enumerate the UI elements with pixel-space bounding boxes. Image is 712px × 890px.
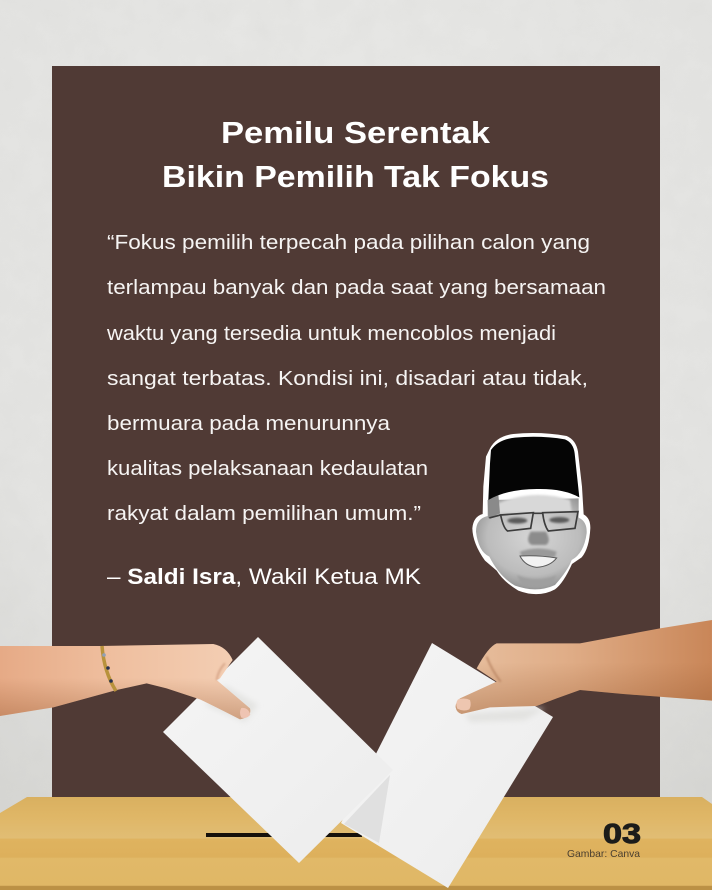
left finger crease [217, 663, 225, 680]
portrait white outline [472, 433, 590, 594]
portrait: Saldi Isra [472, 433, 590, 594]
left thumbnail [240, 708, 250, 718]
right arm shading [456, 620, 712, 714]
portrait smile [520, 556, 557, 567]
box top [0, 797, 712, 890]
quote text: kualitas pelaksanaan kedaulatan [107, 458, 428, 480]
title [162, 115, 549, 194]
right arm shape [456, 620, 712, 714]
quote text: waktu yang tersedia untuk mencoblos menjadi [106, 323, 556, 345]
portrait nose [528, 532, 549, 545]
left ballot [163, 637, 393, 863]
ballot slot [206, 833, 362, 837]
quote text [106, 232, 606, 525]
image credit: Gambar: Canva [567, 848, 640, 860]
left arm shading [0, 644, 250, 719]
quote text: rakyat dalam pemilihan umum.” [107, 503, 421, 525]
quote text: sangat terbatas. Kondisi ini, disadari atau tidak, [107, 368, 588, 390]
bracelet [102, 646, 116, 691]
portrait hair [488, 494, 500, 518]
quote text: “Fokus pemilih terpecah pada pilihan calon yang [107, 232, 590, 254]
thumb shadow on right ballot [465, 708, 545, 722]
right ballot [341, 643, 553, 888]
thumb shadow on left ballot [205, 685, 258, 722]
right finger crease [487, 657, 501, 682]
title: Pemilu Serentak [221, 115, 491, 150]
portrait chin beard [517, 575, 557, 588]
portrait face [476, 498, 587, 589]
left arm [0, 644, 250, 719]
attribution: – Saldi Isra , Wakil Ketua MK [107, 564, 421, 589]
portrait forehead highlight [498, 495, 572, 513]
quote text: bermuara pada menurunnya [107, 413, 391, 435]
quote text: terlampau banyak dan pada saat yang bersamaan [107, 277, 606, 299]
right arm [456, 620, 712, 714]
portrait hat [488, 437, 579, 500]
left arm shape [0, 644, 250, 719]
portrait moustache [520, 548, 557, 557]
brown panel [52, 66, 660, 798]
portrait glasses [489, 512, 578, 531]
title: Bikin Pemilih Tak Fokus [162, 159, 549, 194]
portrait eyes [507, 517, 569, 524]
page number: 03 [603, 818, 641, 849]
wooden ballot box [0, 797, 712, 890]
right thumbnail [456, 698, 471, 711]
right ballot fold shadow [344, 775, 390, 843]
